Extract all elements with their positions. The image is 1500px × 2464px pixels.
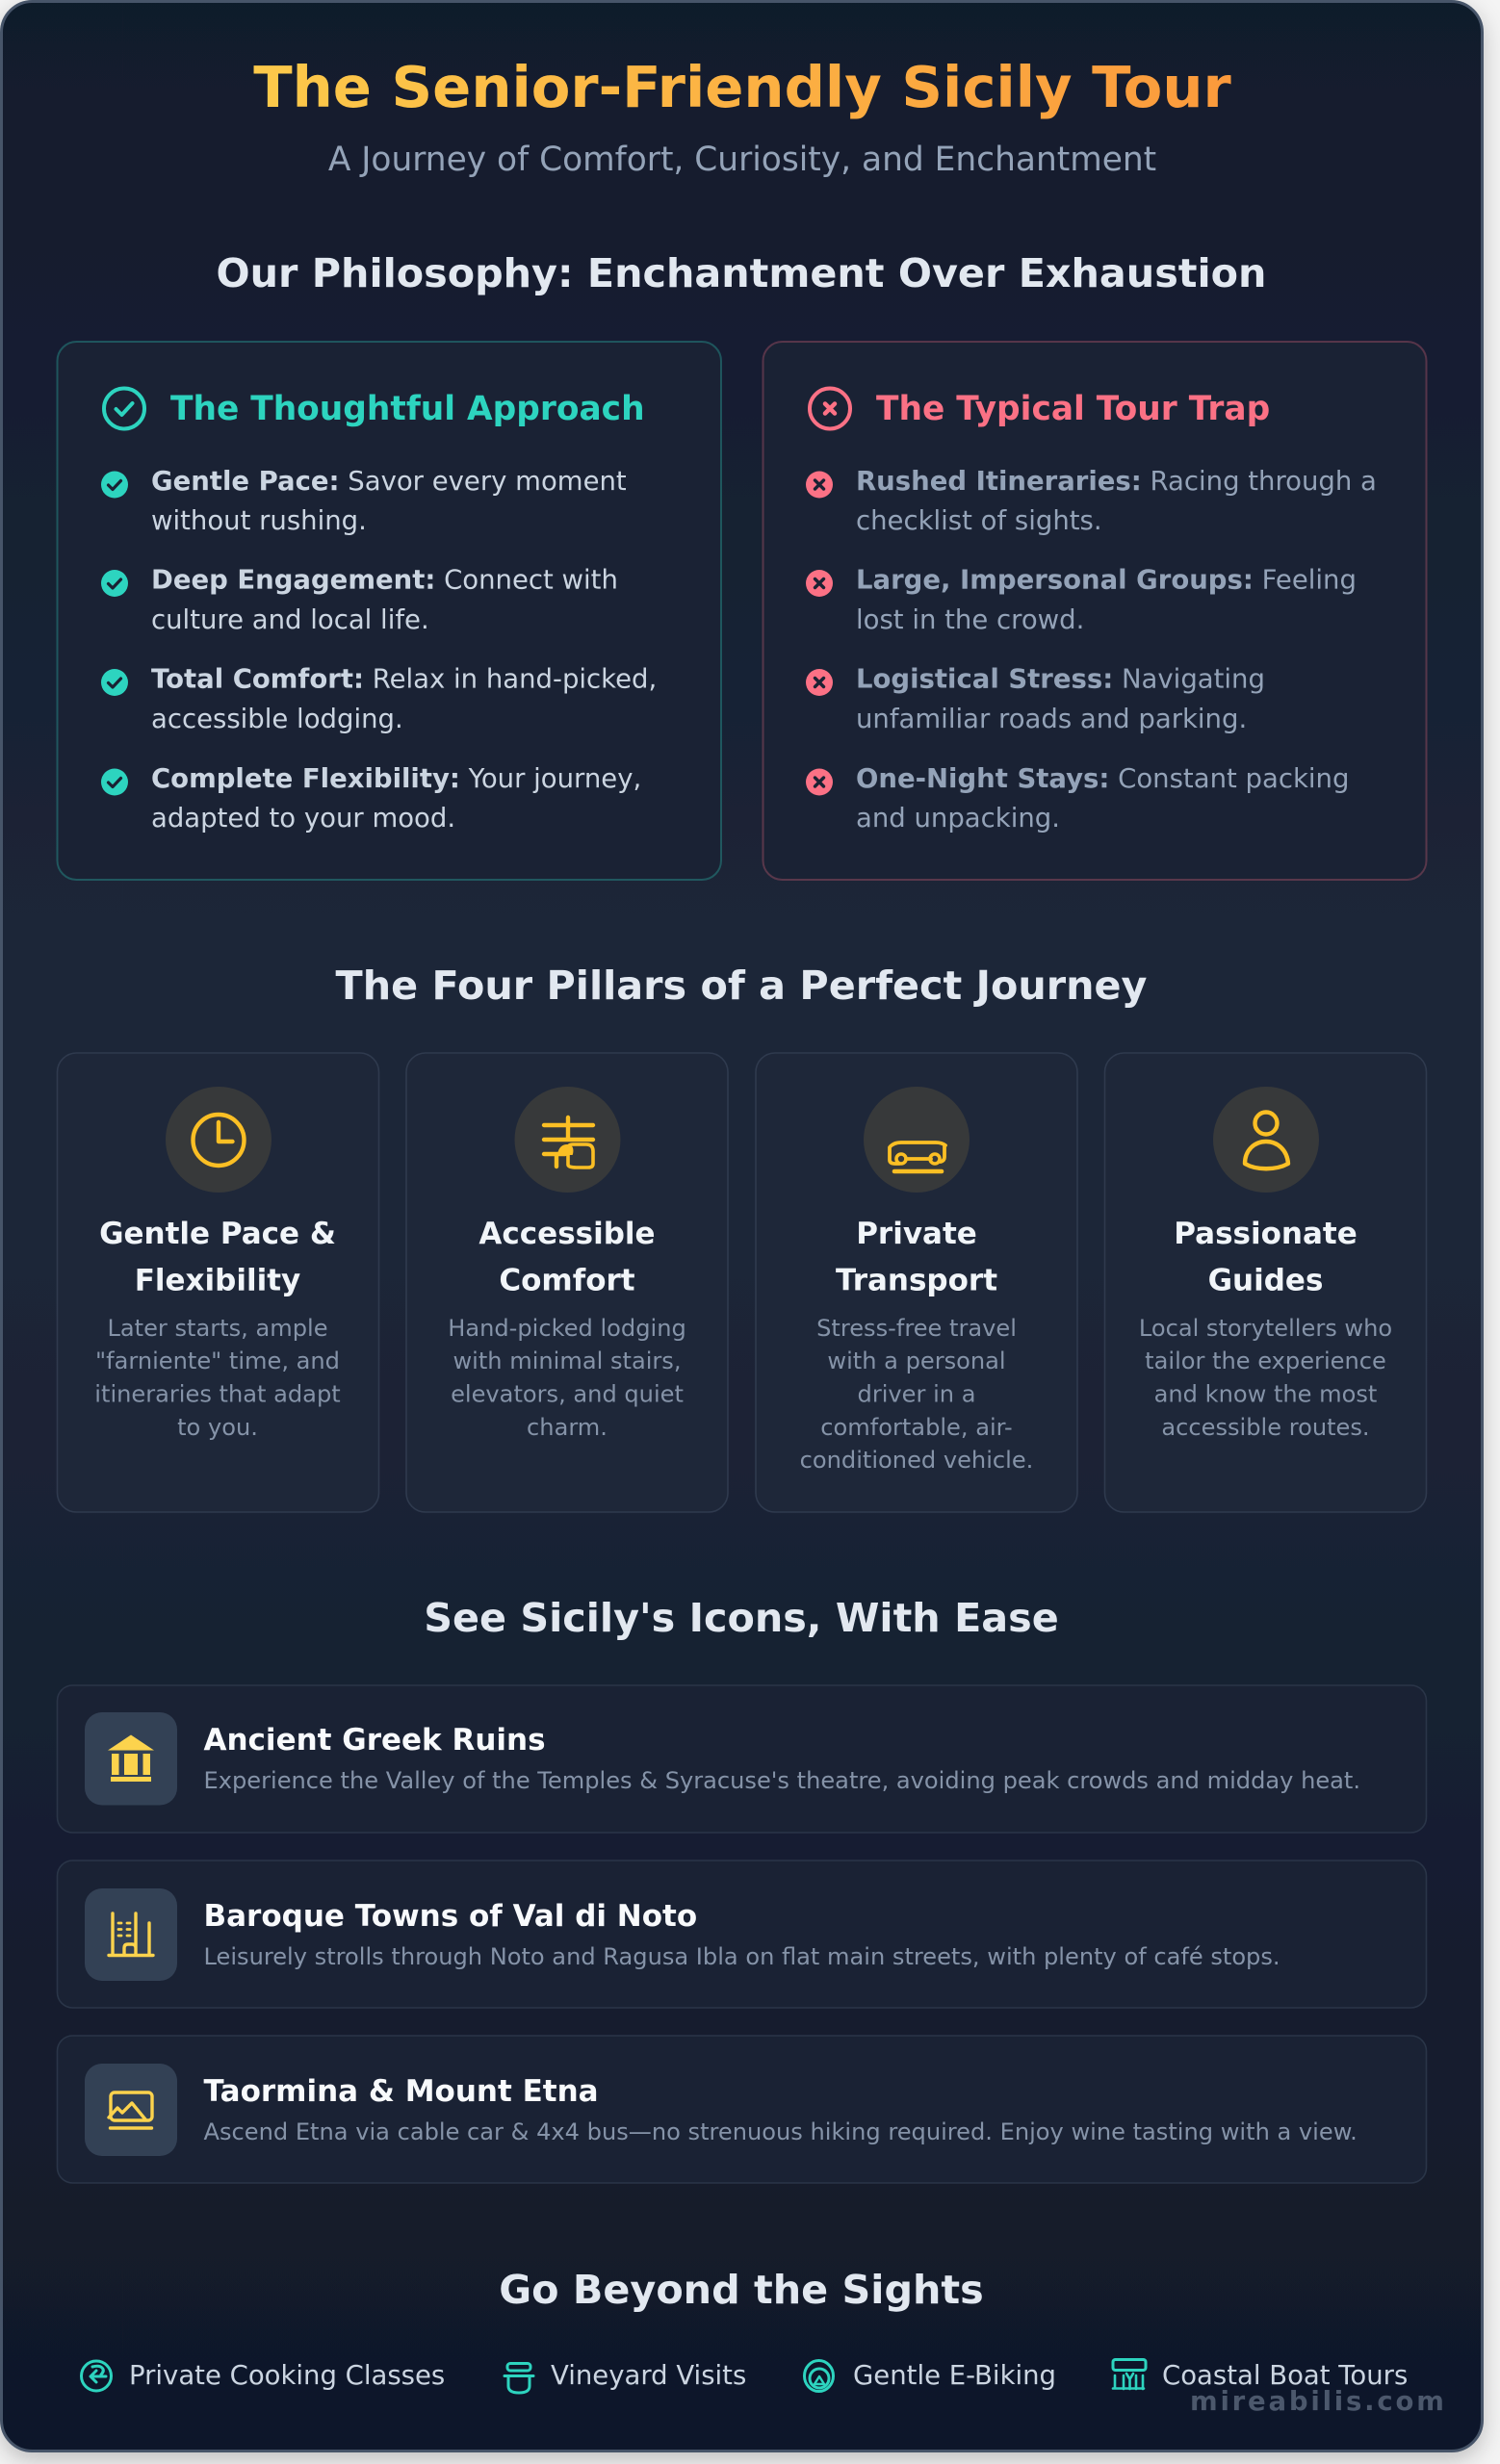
extra: vineyard visits: Vineyard Visits: [551, 2360, 746, 2391]
icon: town buildings: [109, 1913, 153, 1956]
item: rushed itineraries: Rushed Itineraries: Racing through a: [856, 466, 1377, 497]
item: one-night stays: [806, 763, 1349, 834]
item: total comfort: [101, 664, 657, 734]
icon: person: [1245, 1113, 1288, 1168]
pillar: accessible comfort: elevators, and quiet: [451, 1380, 684, 1407]
item: logistical stress: [806, 664, 1265, 734]
item: complete flexibility: Complete Flexibility: Your journey,: [151, 763, 641, 794]
item: rushed itineraries: checklist of sights.: [856, 505, 1102, 536]
site card: baroque towns: Baroque Towns of Val di Noto: [204, 1899, 697, 1934]
panel: the thoughtful approach: [58, 342, 721, 880]
extra: gentle e-biking: Gentle E-Biking: [853, 2360, 1056, 2391]
watermark: mireabilis.com: [1190, 2386, 1447, 2417]
extra: coastal boat tours: Coastal Boat Tours: [1162, 2360, 1408, 2391]
pillar: passionate guides: Guides: [1208, 1263, 1323, 1297]
pillar: gentle pace and flexibility: Gentle Pace &: [99, 1217, 336, 1251]
icon: mountain picture: [109, 2092, 152, 2128]
pillar: passionate guides: accessible routes.: [1161, 1414, 1370, 1441]
pillar: accessible comfort: Comfort: [499, 1263, 635, 1297]
icon: check circle: [104, 389, 144, 429]
pillar: gentle pace and flexibility: to you.: [177, 1414, 258, 1441]
item: logistical stress: Logistical Stress: Navigating: [856, 664, 1265, 695]
pillar: private transport: Stress-free travel: [816, 1315, 1017, 1342]
pillar: gentle pace and flexibility: Later starts, ample: [107, 1315, 328, 1342]
pillar: passionate guides: and know the most: [1154, 1380, 1377, 1407]
item: total comfort: accessible lodging.: [151, 704, 403, 734]
site card: baroque towns: [58, 1861, 1427, 2008]
item: gentle pace: without rushing.: [151, 505, 367, 536]
title: The Senior-Friendly Sicily Tour: [253, 54, 1231, 120]
site card: ancient greek ruins: Experience the Valley of the Temples & Syracuse's theatre, avoiding peak crowds and midday heat.: [204, 1767, 1360, 1794]
pillar: passionate guides: Passionate: [1174, 1217, 1358, 1251]
item: large groups: Large, Impersonal Groups: Feeling: [856, 564, 1357, 595]
pillar: accessible comfort: charm.: [527, 1414, 608, 1441]
pillar: private transport: [756, 1053, 1077, 1512]
heading: philosophy: Our Philosophy: Enchantment Over Exhaustion: [217, 250, 1266, 296]
icon: clock: [193, 1115, 245, 1166]
pillar: accessible comfort: Accessible: [478, 1217, 656, 1251]
pillar: private transport: Transport: [836, 1263, 997, 1297]
pillar: accessible comfort: Hand-picked lodging: [448, 1315, 686, 1342]
icon: bed and building: [544, 1117, 593, 1168]
item: deep engagement: culture and local life.: [151, 604, 429, 635]
icon: car: [890, 1142, 945, 1171]
item: gentle pace: Gentle Pace: Savor every moment: [151, 466, 627, 497]
pillar: private transport: with a personal: [827, 1348, 1006, 1374]
item: one-night stays: One-Night Stays: Constant packing: [856, 763, 1349, 794]
icon: x circle: [810, 389, 850, 429]
site card: taormina and mount etna: [58, 2036, 1427, 2183]
pillar: private transport: conditioned vehicle.: [800, 1447, 1033, 1474]
item: deep engagement: [101, 564, 618, 635]
panel heading: The Typical Tour Trap: [876, 390, 1270, 428]
heading: sicily's icons: See Sicily's Icons, With Ease: [424, 1595, 1059, 1641]
heading: go beyond the sights: Go Beyond the Sights: [499, 2267, 984, 2313]
item: rushed itineraries: [806, 466, 1377, 536]
site card: ancient greek ruins: [58, 1685, 1427, 1833]
item: complete flexibility: adapted to your mood.: [151, 803, 455, 834]
pillar: accessible comfort: with minimal stairs,: [453, 1348, 682, 1374]
subtitle: A Journey of Comfort, Curiosity, and Enchantment: [328, 141, 1156, 179]
item: complete flexibility: [101, 763, 641, 834]
panel: the typical tour trap: [763, 342, 1427, 880]
pillar: private transport: Private: [856, 1217, 977, 1251]
pillar: gentle pace and flexibility: Flexibility: [135, 1263, 300, 1297]
item: logistical stress: unfamiliar roads and parking.: [856, 704, 1247, 734]
pillar: private transport: driver in a: [858, 1380, 975, 1407]
site card: ancient greek ruins: Ancient Greek Ruins: [204, 1723, 546, 1758]
pillar: gentle pace and flexibility: "farniente" time, and: [95, 1348, 340, 1374]
site card: taormina and mount etna: Taormina & Mount Etna: [204, 2074, 599, 2109]
pillar: gentle pace and flexibility: itineraries that adapt: [94, 1380, 341, 1407]
item: gentle pace: [101, 466, 627, 536]
heading: four pillars: The Four Pillars of a Perfect Journey: [336, 962, 1148, 1009]
pillar: passionate guides: [1105, 1053, 1427, 1512]
pillar: accessible comfort: [406, 1053, 728, 1512]
pillar: passionate guides: Local storytellers who: [1139, 1315, 1392, 1342]
item: large groups: lost in the crowd.: [856, 604, 1084, 635]
pillar: passionate guides: tailor the experience: [1145, 1348, 1386, 1374]
panel heading: The Thoughtful Approach: [170, 390, 645, 428]
item: total comfort: Total Comfort: Relax in hand-picked,: [151, 664, 657, 695]
site card: taormina and mount etna: Ascend Etna via cable car & 4x4 bus—no strenuous hiking required. Enjoy wine tasting with a view.: [204, 2118, 1358, 2145]
extra: private cooking classes: Private Cooking Classes: [129, 2360, 445, 2391]
item: large groups: [806, 564, 1357, 635]
item: one-night stays: and unpacking.: [856, 803, 1060, 834]
pillar: gentle pace and flexibility: [58, 1053, 379, 1512]
icon: temple: [108, 1734, 154, 1782]
site card: baroque towns: Leisurely strolls through Noto and Ragusa Ibla on flat main streets, with plenty of café stops.: [204, 1943, 1280, 1970]
pillar: private transport: comfortable, air-: [820, 1414, 1013, 1441]
item: deep engagement: Deep Engagement: Connect with: [151, 564, 618, 595]
